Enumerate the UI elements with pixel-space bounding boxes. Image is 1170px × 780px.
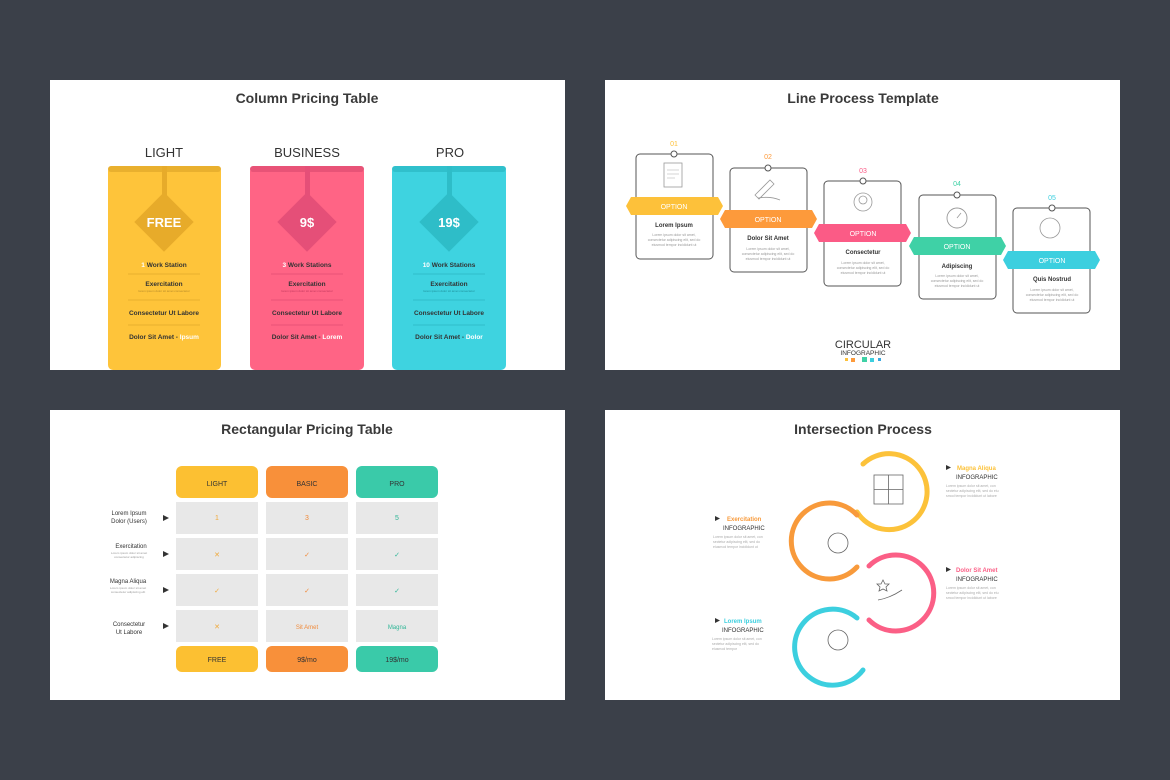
column: pro: 19$ (438, 215, 461, 230)
column: light: Consectetur Ut Labore (129, 310, 199, 317)
column: pro: 10 Work Stations (423, 262, 476, 269)
step 02 (720, 154, 817, 272)
column: pro: Exercitation (430, 281, 468, 288)
step 03 (814, 168, 911, 286)
label: dolor sit amet: sectetur adipiscing elit, sed do eiu (946, 591, 999, 595)
column: business: Exercitation (288, 281, 326, 288)
footer prices: 9$/mo (297, 657, 317, 664)
label: dolor sit amet: Lorem ipsum dolor sit amet, con (946, 586, 996, 590)
label: exercitation: Exercitation (727, 517, 762, 523)
row labels: Lorem Ipsum (111, 511, 147, 517)
header buttons: BASIC (296, 481, 318, 488)
column: pro: lorem ipsum dolor sit amet consectetur (423, 289, 475, 293)
step 01: Lorem ipsum dolor sit amet, (652, 233, 696, 237)
label: dolor sit amet: smod tempor incididunt ut labore (946, 596, 997, 600)
label: lorem ipsum: eiusmod tempor (712, 647, 738, 651)
row labels (110, 511, 169, 636)
column: light: Dolor Sit Amet - Ipsum (129, 334, 199, 341)
label: dolor sit amet: INFOGRAPHIC (956, 577, 998, 583)
step 05: OPTION (1039, 258, 1065, 265)
step 05 (1003, 195, 1100, 313)
logo: circular infographic: CIRCULAR (835, 339, 891, 351)
label: magna aliqua: INFOGRAPHIC (956, 475, 998, 481)
cell values: ✓ (394, 552, 400, 559)
step 02: eiusmod tempor incididunt ut (746, 257, 790, 261)
step 01: OPTION (661, 204, 687, 211)
step 03: 03 (859, 168, 867, 175)
row labels: Magna Aliqua (110, 579, 147, 585)
step 01: Lorem Ipsum (655, 223, 693, 229)
header buttons: PRO (389, 481, 405, 488)
title: line process template: Line Process Template (787, 90, 939, 106)
header buttons: LIGHT (207, 481, 228, 488)
step 01 (626, 141, 723, 259)
step 05: Lorem ipsum dolor sit amet, (1030, 288, 1074, 292)
column: business: Consectetur Ut Labore (272, 310, 342, 317)
step 03: eiusmod tempor incididunt ut (841, 271, 885, 275)
column: business: Dolor Sit Amet - Lorem (272, 334, 342, 341)
label: magna aliqua: sectetur adipiscing elit, sed do eiu (946, 489, 999, 493)
chain of arcs (791, 454, 934, 685)
panel: line process template (605, 80, 1120, 370)
step 02: Dolor Sit Amet (747, 236, 789, 242)
column: pro: PRO (436, 145, 464, 160)
title: rectangular pricing table: Rectangular Pricing Table (221, 421, 393, 437)
table rows (176, 502, 438, 642)
step 03: consectetur adipiscing elit, sed do (837, 266, 889, 270)
step 01: 01 (670, 141, 678, 148)
cell values: ✕ (214, 552, 220, 559)
cell values: 1 (215, 515, 219, 522)
label: dolor sit amet: Dolor Sit Amet (956, 568, 997, 574)
row labels: Lorem ipsum dolor sit amet (110, 586, 146, 590)
panel: rectangular pricing table (50, 410, 565, 700)
footer prices (176, 646, 438, 672)
footer prices: 19$/mo (385, 657, 409, 664)
step 02: consectetur adipiscing elit, sed do (742, 252, 794, 256)
step 02: OPTION (755, 217, 781, 224)
label: exercitation: eiusmod tempor incididunt ut (713, 545, 758, 549)
logo: circular infographic (835, 339, 891, 362)
column: business: BUSINESS (274, 145, 340, 160)
icons (828, 475, 903, 650)
label: dolor sit amet (946, 567, 999, 600)
label: magna aliqua: smod tempor incididunt ut labore (946, 494, 997, 498)
step 03: Lorem ipsum dolor sit amet, (841, 261, 885, 265)
step 01: eiusmod tempor incididunt ut (652, 243, 696, 247)
step 01: consectetur adipiscing elit, sed do (648, 238, 700, 242)
step 04: 04 (953, 181, 961, 188)
step 04: Lorem ipsum dolor sit amet, (935, 274, 979, 278)
title: intersection process: Intersection Process (794, 421, 932, 437)
label: magna aliqua: Lorem ipsum dolor sit amet, con (946, 484, 996, 488)
step 05: Quis Nostrud (1033, 277, 1071, 283)
column: light: Exercitation (145, 281, 183, 288)
step 05: 05 (1048, 195, 1056, 202)
column: business: 9$ (300, 215, 315, 230)
column: light: lorem ipsum dolor sit amet consectetur (138, 289, 190, 293)
column: business (250, 145, 364, 370)
step 04: OPTION (944, 244, 970, 251)
column: pro: Dolor Sit Amet - Dolor (415, 334, 483, 341)
column: light: 1 Work Station (141, 262, 187, 269)
column: light (108, 145, 221, 370)
cell values: Sit Amet (296, 625, 319, 631)
row labels: Ut Labore (116, 630, 143, 636)
cell values: ✓ (394, 588, 400, 595)
column: business: lorem ipsum dolor sit amet consectetur (281, 289, 333, 293)
label: exercitation: Lorem ipsum dolor sit amet, con (713, 535, 763, 539)
footer prices: FREE (208, 657, 227, 664)
label: lorem ipsum: sectetur adipiscing elit, sed do (712, 642, 759, 646)
cell values: ✓ (214, 588, 220, 595)
step 04: eiusmod tempor incididunt ut (935, 284, 979, 288)
panel: intersection process (605, 410, 1120, 700)
label: magna aliqua (946, 465, 999, 498)
label: lorem ipsum (712, 618, 764, 651)
step 02: 02 (764, 154, 772, 161)
step 04: Adipiscing (942, 264, 973, 270)
step 05: consectetur adipiscing elit, sed do (1026, 293, 1078, 297)
cell values: ✓ (304, 588, 310, 595)
row labels: consectetur adipiscing elit (111, 590, 145, 594)
step 03: OPTION (850, 231, 876, 238)
column: light: FREE (147, 215, 182, 230)
cell values: 3 (305, 515, 309, 522)
cell values (214, 515, 407, 631)
logo: circular infographic: INFOGRAPHIC (840, 350, 886, 357)
row labels: Dolor (Users) (111, 519, 147, 525)
cell values: Magna (388, 625, 407, 631)
step 03: Consectetur (845, 250, 881, 256)
row labels: Exercitation (115, 544, 147, 550)
column: light: LIGHT (145, 145, 183, 160)
cell values: ✓ (304, 552, 310, 559)
row labels: Consectetur (113, 622, 145, 628)
label: exercitation (713, 516, 765, 549)
cell values: ✕ (214, 624, 220, 631)
column: pro: Consectetur Ut Labore (414, 310, 484, 317)
label: lorem ipsum: Lorem Ipsum (724, 619, 762, 625)
panel: column pricing table (50, 80, 565, 370)
step 02: Lorem ipsum dolor sit amet, (746, 247, 790, 251)
column: pro (392, 145, 506, 370)
label: lorem ipsum: Lorem ipsum dolor sit amet, con (712, 637, 762, 641)
column: business: 3 Work Stations (282, 262, 332, 269)
label: lorem ipsum: INFOGRAPHIC (722, 628, 764, 634)
header buttons (176, 466, 438, 498)
cell values: 5 (395, 515, 399, 522)
label: exercitation: sectetur adipiscing elit, sed do (713, 540, 760, 544)
title: column pricing table: Column Pricing Table (236, 90, 379, 106)
row labels: consectetur adipiscing (114, 555, 144, 559)
label: exercitation: INFOGRAPHIC (723, 526, 765, 532)
step 04 (909, 181, 1006, 299)
label: magna aliqua: Magna Aliqua (957, 466, 996, 472)
row labels: Lorem ipsum dolor sit amet (111, 551, 147, 555)
step 05: eiusmod tempor incididunt ut (1030, 298, 1074, 302)
step 04: consectetur adipiscing elit, sed do (931, 279, 983, 283)
